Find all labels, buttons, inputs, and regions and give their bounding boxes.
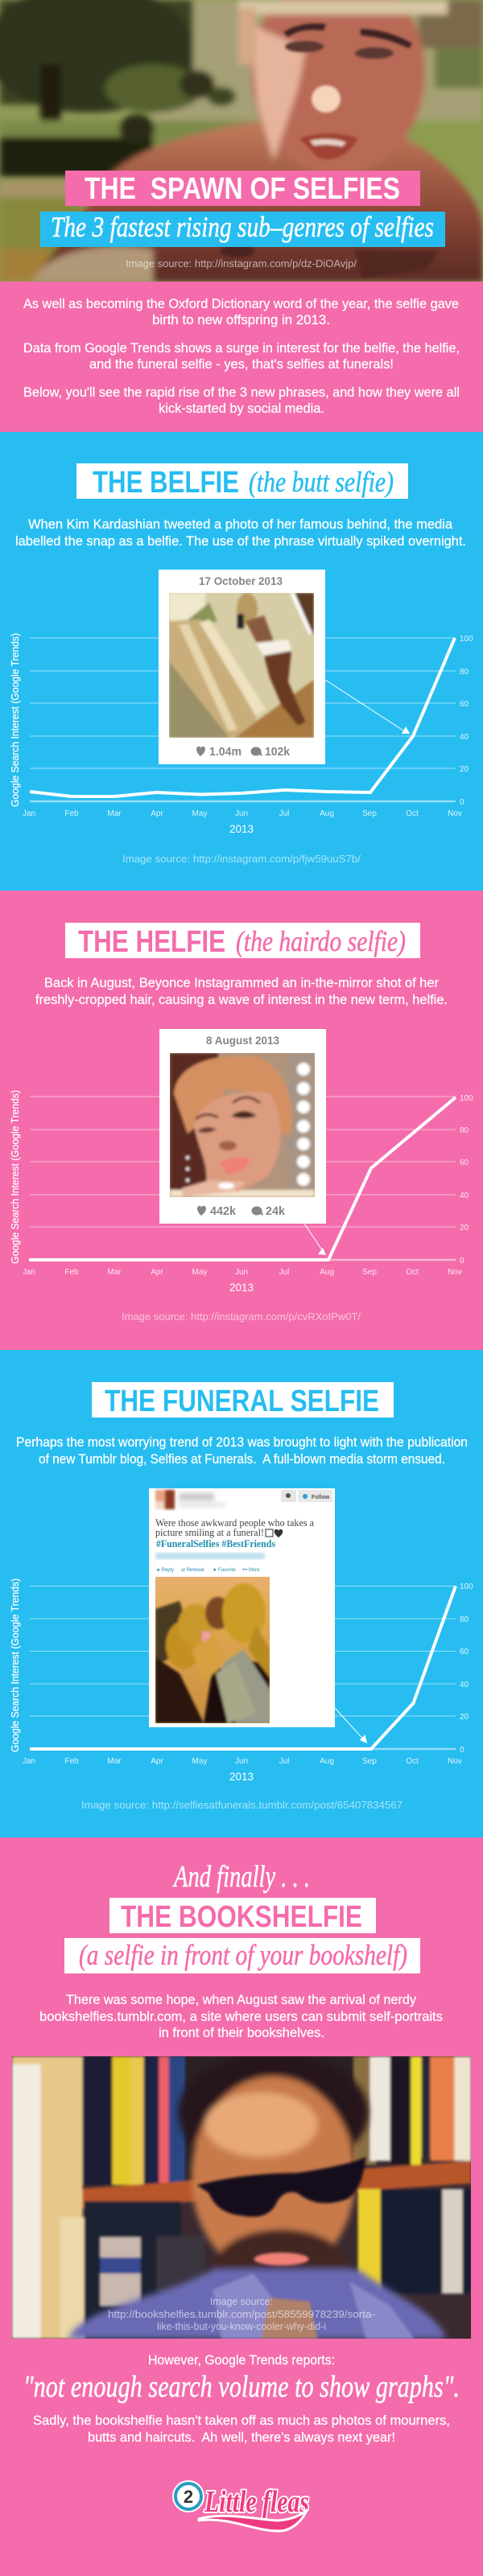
line chart: helfie search interest: 80 — [460, 1126, 469, 1135]
line chart: belfie search interest: 40 — [460, 733, 469, 742]
line chart: funeral selfie search interest: Aug — [320, 1757, 334, 1766]
panel: the belfie — [0, 432, 483, 891]
logo: 2 little fleas: Little fleas — [204, 2485, 309, 2519]
arrow — [325, 680, 410, 734]
line chart: helfie search interest: Jul — [279, 1268, 289, 1277]
heading: (the hairdo selfie) — [236, 925, 406, 957]
subheading: (a selfie in front of your bookshelf) — [79, 1939, 407, 1971]
line chart: funeral selfie search interest: May — [192, 1757, 207, 1766]
image source overlay — [108, 2296, 375, 2332]
panel: the funeral selfie — [0, 1350, 483, 1837]
icon: heart — [196, 747, 205, 756]
line chart: belfie search interest: Sep — [362, 809, 377, 818]
line chart: funeral selfie search interest: 60 — [460, 1648, 469, 1656]
line chart: helfie search interest: Jan — [23, 1268, 35, 1277]
follow buttons — [281, 1490, 332, 1502]
heading: (the butt selfie) — [249, 466, 394, 498]
description: freshly-cropped hair, causing a wave of interest in the new term, helfie. — [35, 992, 448, 1007]
line chart: helfie search interest: 0 — [460, 1257, 464, 1265]
tweet actions: ••• More — [242, 1568, 260, 1573]
tweet text: Were those awkward people who takes a — [155, 1517, 314, 1529]
panel: the bookshelfie — [0, 1837, 483, 2576]
line chart: funeral selfie search interest: Jul — [279, 1757, 289, 1766]
text: google trends reports: However, Google Trends reports: — [148, 2352, 335, 2368]
blurred timestamp — [155, 1553, 265, 1559]
line chart: funeral selfie search interest: Jun — [235, 1757, 248, 1766]
panel: introduction: birth to new offspring in 2013. — [152, 312, 330, 327]
line chart: funeral selfie search interest: Jan — [23, 1757, 35, 1766]
instagram card: 8 August 2013: 24k — [266, 1204, 286, 1218]
line chart: funeral selfie search interest: Nov — [448, 1757, 462, 1766]
blurred username — [179, 1493, 225, 1507]
description: There was some hope, when August saw the arrival of nerdy — [66, 1992, 416, 2007]
line chart: funeral selfie search interest: 100 — [460, 1582, 473, 1591]
photo: bookshelf selfie — [11, 2052, 472, 2339]
icon: comment — [251, 747, 262, 756]
tweet actions: ★ Favorite — [213, 1567, 236, 1573]
line chart: belfie search interest — [10, 633, 473, 835]
line chart: helfie search interest: 40 — [460, 1191, 469, 1200]
line chart: belfie search interest: Apr — [151, 809, 163, 818]
line chart: funeral selfie search interest: 40 — [460, 1681, 469, 1689]
description: bookshelfies.tumblr.com, a site where users can submit self-portraits — [39, 2009, 443, 2024]
description: When Kim Kardashian tweeted a photo of her famous behind, the media — [28, 516, 453, 532]
line chart: belfie search interest: Aug — [320, 809, 334, 818]
instagram card: 8 August 2013 — [159, 1029, 326, 1224]
title banner: THE SPAWN OF SELFIES — [85, 172, 400, 206]
instagram card: 17 October 2013: 17 October 2013 — [199, 574, 283, 587]
line chart: belfie search interest: 60 — [460, 700, 469, 709]
description — [39, 1992, 443, 2040]
line chart: belfie search interest: 2013 — [229, 823, 254, 835]
image source: Image source: http://instagram.com/p/cvRXoIPw0T/ — [122, 1311, 361, 1323]
line chart: belfie search interest: 0 — [460, 798, 464, 807]
heading: THE HELFIE — [78, 925, 225, 959]
line chart: funeral selfie search interest: 80 — [460, 1615, 469, 1624]
image source overlay: like-this-but-you-know-cooler-why-did-i — [157, 2321, 326, 2332]
line chart: belfie search interest: Nov — [448, 809, 462, 818]
line chart: helfie search interest: Mar — [107, 1268, 122, 1277]
line chart: helfie search interest: 2013 — [229, 1282, 254, 1294]
instagram card: 8 August 2013: 8 August 2013 — [206, 1034, 279, 1047]
line chart: helfie search interest: 100 — [460, 1094, 473, 1103]
tweet text — [155, 1517, 314, 1549]
line chart: funeral selfie search interest: 0 — [460, 1746, 464, 1755]
line chart: funeral selfie search interest: 2013 — [229, 1771, 254, 1783]
closing text: Sadly, the bookshelfie hasn't taken off as much as photos of mourners, — [33, 2413, 450, 2428]
heading: THE FUNERAL SELFIE — [105, 1385, 379, 1418]
description — [15, 516, 466, 549]
follow buttons: Follow — [312, 1495, 330, 1500]
panel: introduction: As well as becoming the Oxford Dictionary word of the year, the selfie gave — [23, 296, 459, 311]
line chart: helfie search interest: 20 — [460, 1224, 469, 1232]
line chart: funeral selfie search interest: Apr — [151, 1757, 163, 1766]
heading: THE BOOKSHELFIE — [121, 1900, 362, 1934]
line chart: helfie search interest — [10, 1090, 473, 1294]
panel: the helfie — [0, 891, 483, 1350]
line chart: belfie search interest: Oct — [406, 809, 419, 818]
line chart: belfie search interest: Mar — [107, 809, 122, 818]
line chart: belfie search interest: Jun — [235, 809, 248, 818]
line chart: funeral selfie search interest: Mar — [107, 1757, 122, 1766]
image source overlay: http://bookshelfies.tumblr.com/post/58559978239/sorta- — [108, 2309, 375, 2320]
line chart: helfie search interest: Feb — [64, 1268, 79, 1277]
description: of new Tumblr blog, Selfies at Funerals. A full-blown media storm ensued. — [39, 1451, 445, 1467]
arrow — [335, 1708, 367, 1743]
tweet actions: ◄ Reply — [155, 1568, 174, 1573]
heading — [65, 923, 420, 959]
heading: THE BELFIE — [93, 466, 239, 500]
description — [16, 1434, 468, 1467]
tweet card — [149, 1488, 335, 1727]
panel: introduction: Below, you'll see the rapid rise of the 3 new phrases, and how they were all — [23, 385, 460, 400]
avatar — [155, 1490, 175, 1509]
description — [35, 975, 448, 1007]
line chart: belfie search interest: May — [192, 809, 207, 818]
closing text — [33, 2413, 450, 2445]
line chart: funeral selfie search interest: Feb — [64, 1757, 79, 1766]
line chart: belfie search interest: Jan — [23, 809, 35, 818]
line chart: helfie search interest: May — [192, 1268, 207, 1277]
line chart: helfie search interest: Aug — [320, 1268, 334, 1277]
panel: hero photo — [0, 0, 483, 282]
image source: Image source: http://instagram.com/p/fjw59uuS7b/ — [122, 854, 361, 865]
line chart: helfie search interest: Jun — [235, 1268, 248, 1277]
line chart: funeral selfie search interest — [10, 1578, 473, 1783]
logo: 2 little fleas: 2 — [184, 2487, 193, 2507]
tweet actions — [155, 1567, 260, 1573]
tweet text: #FuneralSelfies #BestFriends — [156, 1538, 275, 1549]
line chart: belfie search interest: Feb — [64, 809, 79, 818]
icon: heart — [197, 1206, 206, 1216]
line chart: funeral selfie search interest: Google Search Interest (Google Trends) — [10, 1578, 21, 1752]
line chart: helfie search interest: Google Search Interest (Google Trends) — [10, 1090, 21, 1264]
line chart: helfie search interest: Nov — [448, 1268, 462, 1277]
logo: 2 little fleas — [172, 2480, 309, 2531]
instagram card: 17 October 2013 — [159, 570, 325, 764]
line chart: belfie search interest: Jul — [279, 809, 289, 818]
panel: introduction: Data from Google Trends shows a surge in interest for the belfie, the helfie, — [23, 340, 460, 356]
description: labelled the snap as a belfie. The use of the phrase virtually spiked overnight. — [15, 533, 466, 549]
line chart: helfie search interest: Apr — [151, 1268, 163, 1277]
tweet photo — [155, 1577, 270, 1723]
lead-in: And finally . . . — [172, 1860, 310, 1894]
line chart: funeral selfie search interest: 20 — [460, 1713, 469, 1722]
icon: comment — [251, 1207, 263, 1216]
line chart: funeral selfie search interest: Sep — [362, 1757, 377, 1766]
line chart: helfie search interest: 60 — [460, 1158, 469, 1167]
image source: Image source: http://instagram.com/p/dz-DiOAvjp/ — [126, 258, 357, 270]
line chart: belfie search interest: 20 — [460, 765, 469, 774]
tweet actions: ⇄ Retweet — [181, 1567, 204, 1573]
instagram card: 17 October 2013: 1.04m — [209, 745, 242, 759]
arrow — [304, 1224, 326, 1255]
image source overlay: Image source: — [210, 2296, 273, 2307]
line chart: belfie search interest: 80 — [460, 668, 469, 677]
instagram card: 17 October 2013: 102k — [265, 745, 291, 759]
line chart: helfie search interest: Oct — [406, 1268, 419, 1277]
instagram card: 8 August 2013: 442k — [210, 1204, 237, 1218]
panel: introduction — [0, 282, 483, 432]
line chart: belfie search interest: 100 — [460, 635, 473, 644]
tweet text: picture smiling at a funeral! — [155, 1527, 264, 1538]
description: in front of their bookshelves. — [159, 2025, 324, 2040]
line chart: helfie search interest: Sep — [362, 1268, 377, 1277]
line chart: funeral selfie search interest: Oct — [406, 1757, 419, 1766]
panel: introduction: and the funeral selfie - yes, that's selfies at funerals! — [89, 356, 394, 372]
closing text: butts and haircuts. Ah well, there's always next year! — [88, 2430, 395, 2445]
panel: introduction: kick-started by social media. — [159, 401, 324, 416]
image source: Image source: http://selfiesatfunerals.tumblr.com/post/65407834567 — [81, 1800, 402, 1811]
description: Back in August, Beyonce Instagrammed an in-the-mirror shot of her — [44, 975, 439, 990]
line chart: belfie search interest: Google Search Interest (Google Trends) — [10, 633, 21, 807]
heading — [76, 463, 408, 500]
